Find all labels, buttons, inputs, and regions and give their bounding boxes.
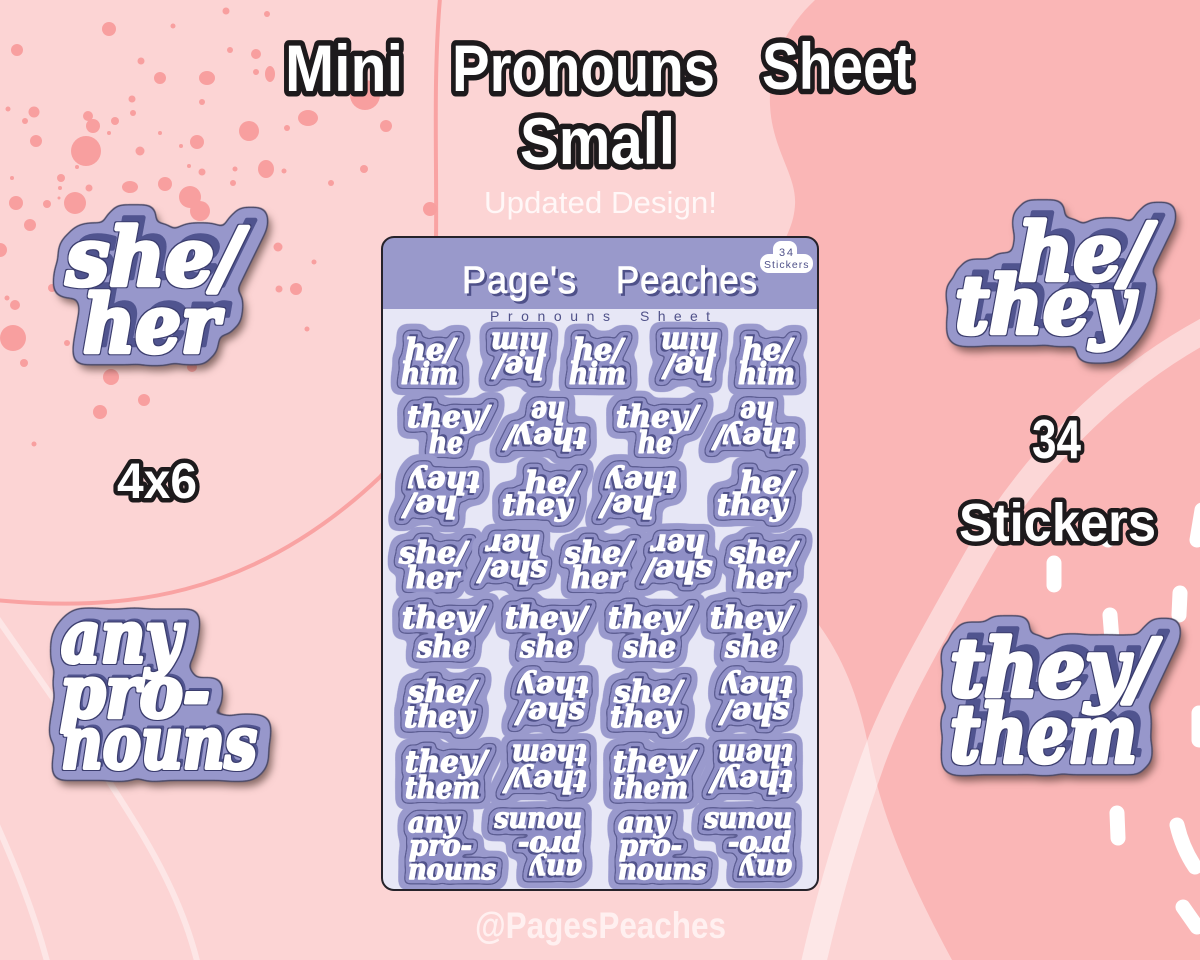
stickers grid: [398, 325, 800, 886]
sticker: they/them: them: [950, 687, 1137, 781]
sticker: any pronouns: nouns: [61, 700, 257, 785]
they/she 4: they/: [710, 601, 795, 636]
she/they 4 rotated: they: [721, 669, 793, 704]
she/they 3: they: [610, 700, 682, 735]
any pronouns 4 rotated: any: [739, 853, 792, 886]
she/her 4 rotated: she/: [641, 553, 713, 588]
they/he 2 rotated: he: [531, 394, 565, 429]
sheet subtitle: Pronouns Sheet: Sheet: [640, 308, 710, 324]
any pronouns 4 rotated: pro-: [728, 830, 791, 863]
she/her 2 rotated: she/: [476, 553, 548, 588]
they/them 3: they/: [613, 745, 698, 780]
he/him 4 rotated: him: [661, 325, 718, 360]
paint splatter: [0, 8, 437, 446]
badge: 34 Stickers: Stickers: [764, 259, 809, 271]
he/they 1 rotated: they: [408, 464, 480, 499]
he/they 4: he/: [740, 466, 796, 501]
title line 1: Mini Pronouns Sheet: Pronouns: [452, 31, 715, 105]
they/he 4 rotated: they/: [711, 420, 796, 455]
she/they 3: she/: [613, 675, 685, 710]
he/him 3: he/: [573, 333, 626, 368]
sheet border: [382, 237, 818, 890]
background arc: wide pale band: [812, 325, 1200, 960]
she/her 1: her: [406, 561, 461, 596]
they/he 4 rotated: he: [740, 394, 774, 429]
sheet brand: Page's Peaches: Peaches: [618, 262, 760, 304]
he/they 3 rotated: he/: [598, 488, 654, 523]
they/them 1: they/: [405, 745, 490, 780]
white dashes: right: [1054, 510, 1200, 927]
any pronouns 3: any: [618, 806, 671, 839]
handle: @PagesPeaches: @PagesPeaches: [475, 905, 726, 946]
they/she 2: they/: [505, 601, 590, 636]
any pronouns 3: nouns: [618, 853, 706, 886]
sheet background: [382, 237, 818, 890]
they/he 3: they/: [616, 400, 701, 435]
he/him 3: him: [569, 357, 626, 392]
background line: pink circle arc: [0, 0, 440, 604]
they/he 3: he: [638, 426, 672, 461]
they/she 3: they/: [608, 601, 693, 636]
title line 2: Small: Small: [520, 104, 675, 178]
she/they 2 rotated: she/: [514, 695, 586, 730]
they/he 1: he: [429, 426, 463, 461]
he/they 1 rotated: he/: [401, 488, 457, 523]
he/him 2 rotated: he/: [491, 349, 544, 384]
background arcs: pale lower left: [0, 618, 198, 960]
he/him 1: him: [401, 357, 458, 392]
she/they 2 rotated: they: [517, 669, 589, 704]
sheet brand: Page's Peaches: [462, 260, 760, 304]
sheet header band: [382, 237, 818, 309]
she/her 2 rotated: her: [485, 527, 540, 562]
sticker sheet: [382, 237, 818, 890]
sticker: he/they: they: [955, 258, 1138, 352]
he/him 1: he/: [405, 333, 458, 368]
she/they 4 rotated: she/: [718, 695, 790, 730]
sticker: she/her: she/: [65, 210, 249, 304]
they/she 1: they/: [402, 601, 487, 636]
they/them 2 rotated: them: [512, 737, 587, 772]
label: 34: 34: [1032, 408, 1081, 470]
any pronouns 1: nouns: [408, 853, 496, 886]
sheet brand: Page's Peaches: Page's: [464, 262, 580, 304]
any pronouns 2 rotated: pro-: [518, 830, 581, 863]
he/they 4: they: [717, 488, 789, 523]
she/they 1: they: [404, 700, 476, 735]
any pronouns 4 rotated: nouns: [704, 806, 792, 839]
she/they 1: she/: [407, 675, 479, 710]
sticker: they/them: they/: [950, 621, 1161, 715]
any pronouns 2 rotated: any: [529, 853, 582, 886]
sheet brand: Page's Peaches: Page's: [462, 260, 577, 302]
they/she 1: she: [416, 630, 470, 665]
any pronouns 2 rotated: nouns: [494, 806, 582, 839]
they/them 2 rotated: they/: [502, 763, 587, 798]
any pronouns 1: any: [408, 806, 461, 839]
they/she 3: she: [622, 630, 676, 665]
they/them 4 rotated: them: [718, 737, 793, 772]
she/her 4 rotated: her: [650, 527, 705, 562]
they/he 2 rotated: they/: [502, 420, 587, 455]
label: Stickers: Stickers: [959, 493, 1156, 553]
title: [285, 29, 912, 178]
sticker: any pronouns: pro-: [60, 649, 210, 734]
sticker: any pronouns: any: [61, 594, 185, 679]
sticker: he/they: he/: [1018, 205, 1156, 299]
they/them 1: them: [405, 771, 480, 806]
subtitle: Updated Design!: Updated Design!: [484, 185, 717, 220]
background blob: right: [770, 0, 1200, 960]
she/her 1: she/: [398, 536, 470, 571]
badge: 34 Stickers: 34: [779, 247, 793, 259]
she/her 5: her: [736, 561, 791, 596]
they/them 4 rotated: they/: [708, 763, 793, 798]
they/she 2: she: [519, 630, 573, 665]
they/them 3: them: [613, 771, 688, 806]
he/him 2 rotated: him: [491, 325, 548, 360]
title line 1: Mini Pronouns Sheet: Sheet: [762, 29, 912, 103]
sheet brand: Page's Peaches: Peaches: [616, 260, 758, 302]
sticker: she/her: her: [83, 277, 223, 371]
label: 4x6: 4x6: [117, 453, 197, 509]
he/him 5: him: [738, 357, 795, 392]
title line 1: Mini Pronouns Sheet: Mini: [285, 31, 403, 105]
he/him 5: he/: [742, 333, 795, 368]
he/they 2: they: [502, 488, 574, 523]
sheet subtitle: Pronouns Sheet: Pronouns: [490, 308, 610, 324]
any pronouns 3: pro-: [619, 829, 682, 862]
she/her 3: she/: [563, 536, 635, 571]
they/he 1: they/: [407, 400, 492, 435]
they/she 4: she: [724, 630, 778, 665]
she/her 5: she/: [728, 536, 800, 571]
he/they 2: he/: [525, 466, 581, 501]
badge: 34 Stickers: [760, 241, 813, 273]
he/they 3 rotated: they: [605, 464, 677, 499]
she/her 3: her: [571, 561, 626, 596]
any pronouns 1: pro-: [409, 829, 472, 862]
he/him 4 rotated: he/: [661, 349, 714, 384]
